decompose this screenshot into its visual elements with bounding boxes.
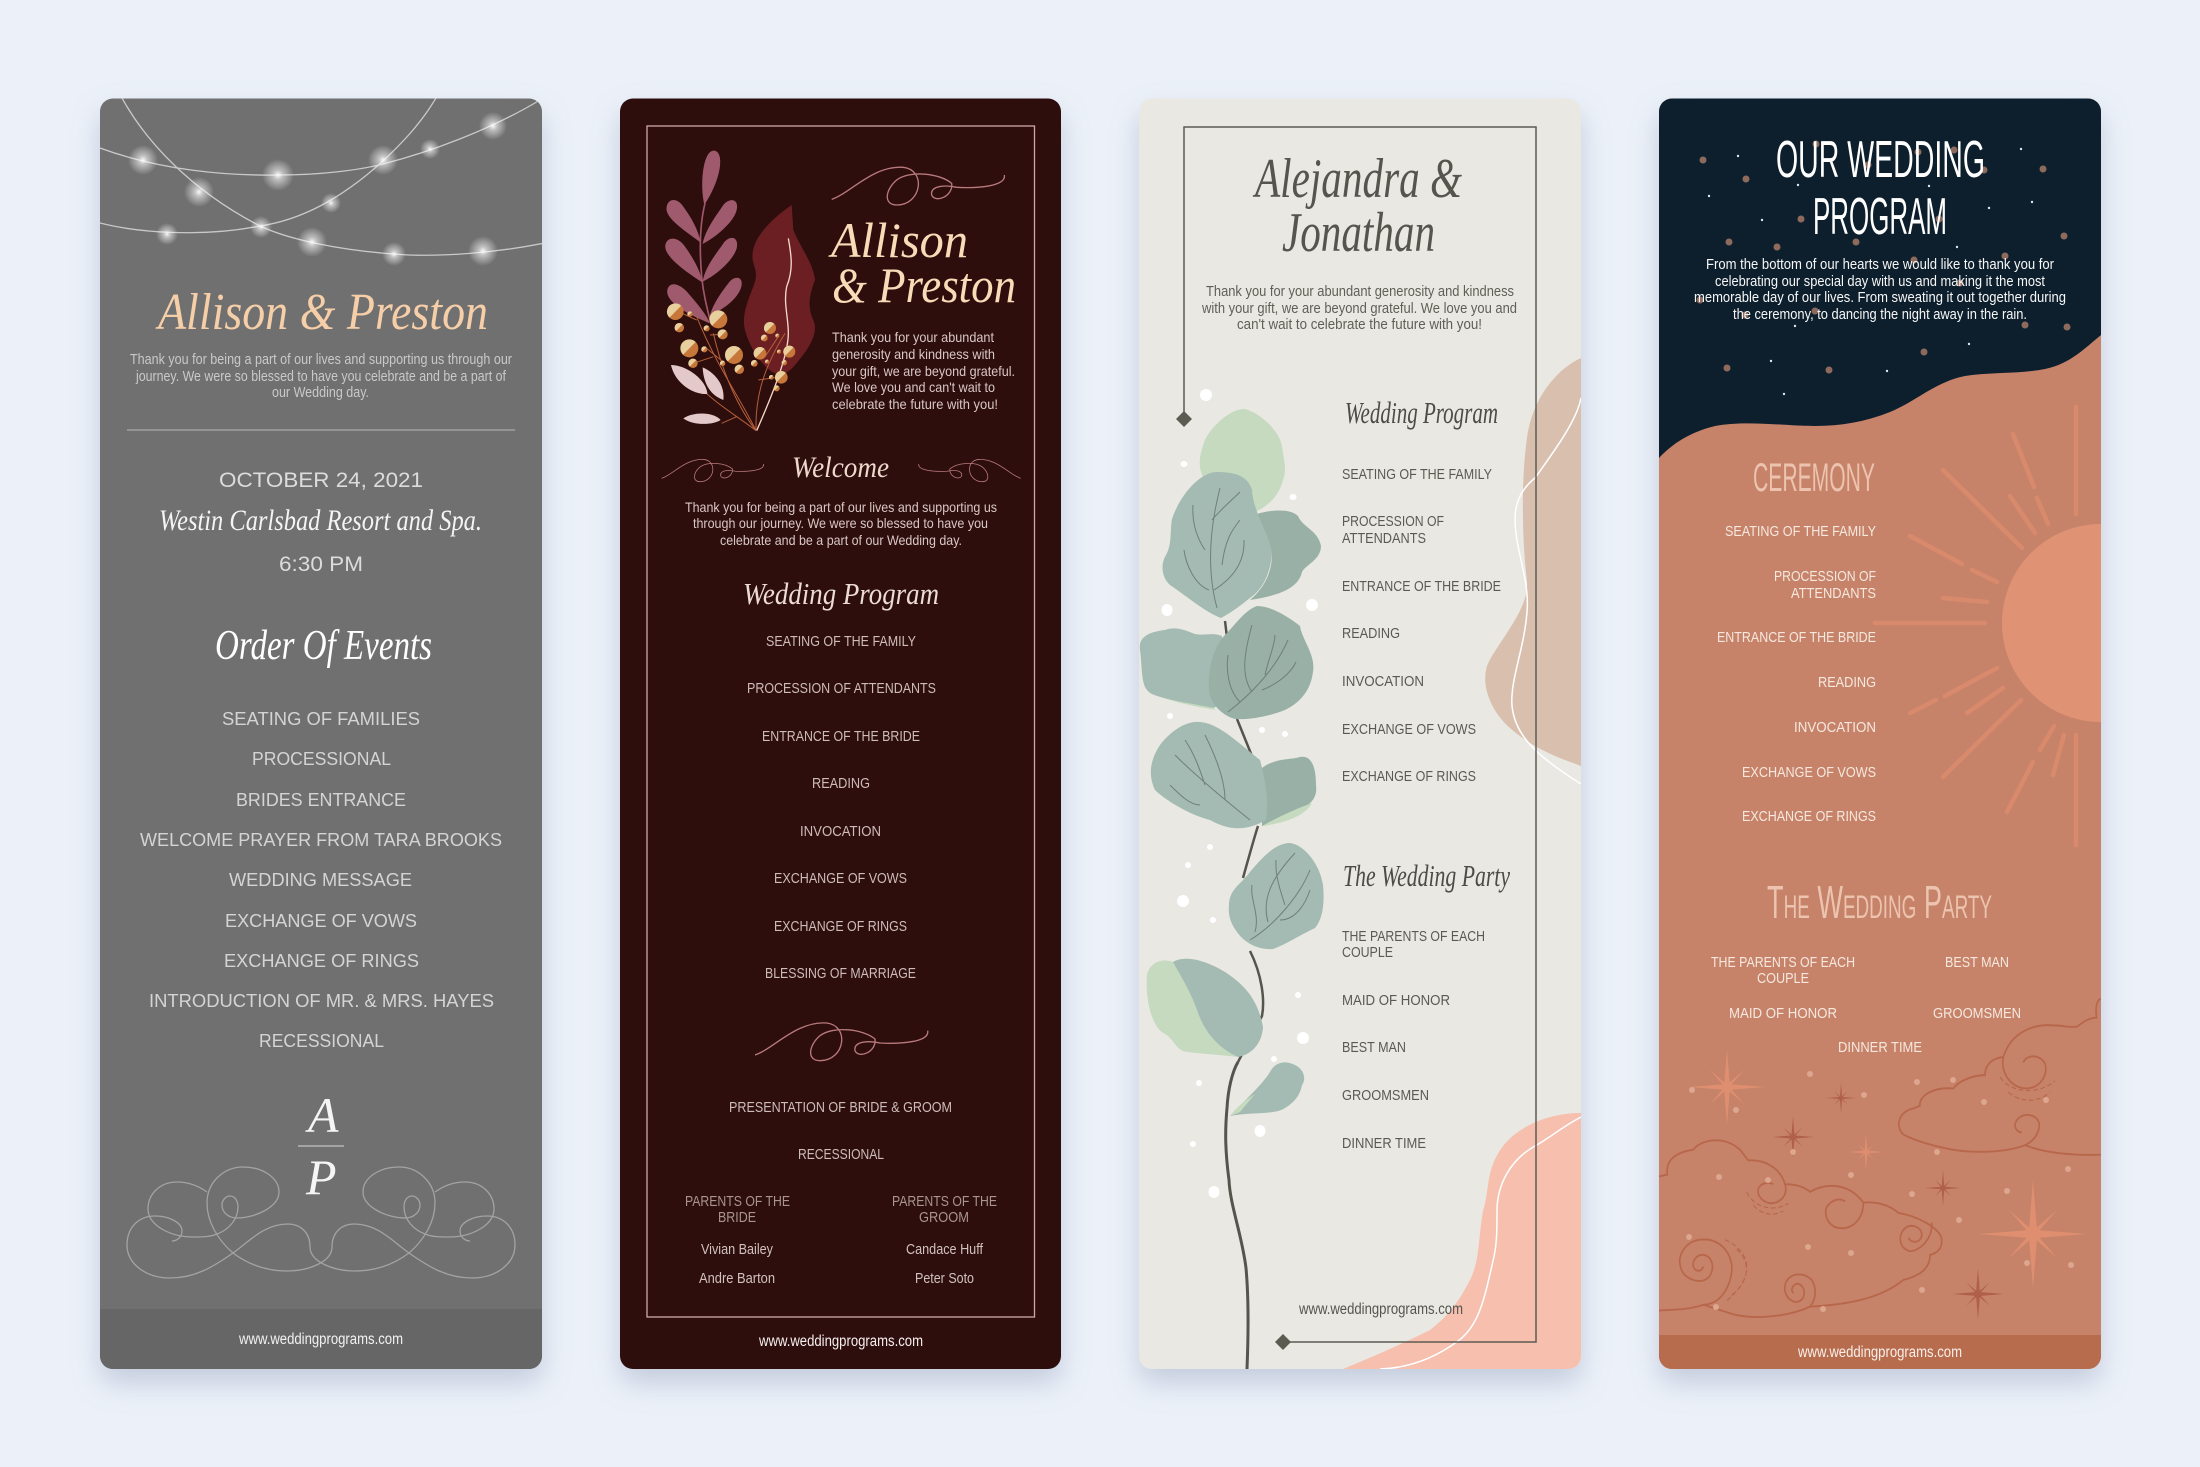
ceremony list: EXCHANGE OF RINGS xyxy=(1742,808,1876,825)
ceremony list: INVOCATION xyxy=(1794,719,1876,736)
wedding party list: DINNER TIME xyxy=(1342,1135,1426,1152)
program list: EXCHANGE OF RINGS xyxy=(774,918,907,935)
wedding party list: MAID OF HONOR xyxy=(1342,992,1450,1009)
program list: EXCHANGE OF VOWS xyxy=(774,870,907,887)
heading: Allison & Preston: Allison xyxy=(828,212,968,268)
ceremony list: SEATING OF THE FAMILY xyxy=(1725,523,1876,540)
heading: Alejandra & Jonathan: Alejandra & xyxy=(1252,148,1462,210)
parents of the groom: PARENTS OF THE xyxy=(892,1194,997,1210)
thank-you paragraph: memorable day of our lives. From sweating it out together during xyxy=(1694,290,2066,306)
order of events list: PROCESSIONAL xyxy=(252,748,391,769)
order of events list: EXCHANGE OF RINGS xyxy=(224,950,419,971)
footer url: www.weddingprograms.com xyxy=(238,1331,403,1348)
wedding party names: THE PARENTS OF EACH xyxy=(1711,954,1855,971)
thank-you paragraph: Thank you for your abundant xyxy=(832,329,994,345)
intro paragraph: journey. We were so blessed to have you celebrate and be a part of xyxy=(135,369,507,385)
intro paragraph xyxy=(130,352,512,401)
program list: ENTRANCE OF THE BRIDE xyxy=(1342,578,1501,595)
welcome paragraph: through our journey. We were so blessed to have you xyxy=(693,515,988,531)
heading: The Wedding Party: The Wedding Party xyxy=(1767,876,1992,928)
order of events list: RECESSIONAL xyxy=(259,1030,384,1051)
monogram A and P xyxy=(298,1087,344,1205)
thank-you paragraph: the ceremony, to dancing the night away in the rain. xyxy=(1733,307,2027,323)
thank-you paragraph: can't wait to celebrate the future with you! xyxy=(1237,317,1482,333)
program list: EXCHANGE OF VOWS xyxy=(1342,721,1476,738)
date and venue: 6:30 PM xyxy=(279,553,363,576)
wedding party names: COUPLE xyxy=(1757,970,1809,987)
closing list xyxy=(729,1099,952,1163)
heading: Order Of Events: Order Of Events xyxy=(215,623,432,669)
heading: Our Wedding Program: OUR WEDDING xyxy=(1776,131,1985,189)
closing list: PRESENTATION OF BRIDE & GROOM xyxy=(729,1099,952,1116)
program list: BLESSING OF MARRIAGE xyxy=(765,965,916,982)
heading: Wedding Program: Wedding Program xyxy=(1345,395,1498,430)
thank-you paragraph: We love you and can't wait to xyxy=(832,379,995,395)
heading: Alejandra & Jonathan xyxy=(1252,148,1462,264)
program list xyxy=(1342,466,1501,785)
thank-you paragraph: Thank you for your abundant generosity and kindness xyxy=(1206,284,1514,300)
parents of the bride: Vivian Bailey xyxy=(701,1242,774,1258)
ceremony list: ENTRANCE OF THE BRIDE xyxy=(1717,629,1876,646)
order of events list: SEATING OF FAMILIES xyxy=(222,708,420,729)
program list: READING xyxy=(812,775,870,792)
heading: Allison & Preston: & Preston xyxy=(832,257,1016,313)
parents of the groom xyxy=(892,1194,997,1287)
divider flourish xyxy=(755,1023,928,1061)
intro paragraph: our Wedding day. xyxy=(272,385,369,401)
ceremony list: EXCHANGE OF VOWS xyxy=(1742,764,1876,781)
clouds, stars and dots illustration xyxy=(1659,999,2101,1320)
welcome paragraph xyxy=(685,499,997,548)
ceremony list: ATTENDANTS xyxy=(1791,585,1876,602)
ceremony list: PROCESSION OF xyxy=(1774,568,1876,585)
footer band grey xyxy=(100,1309,542,1369)
heading: Ceremony: CEREMONY xyxy=(1753,456,1875,500)
ornamental flourish xyxy=(127,1167,515,1278)
heading: Our Wedding Program: PROGRAM xyxy=(1813,188,1947,246)
footer url: www.weddingprograms.com xyxy=(758,1333,923,1350)
parents of the groom: Peter Soto xyxy=(915,1271,974,1287)
wedding party names: GROOMSMEN xyxy=(1933,1005,2021,1022)
program list: PROCESSION OF ATTENDANTS xyxy=(747,680,936,697)
date and venue: Westin Carlsbad Resort and Spa. xyxy=(159,504,482,537)
thin frame with diamond ends xyxy=(1176,127,1536,1350)
heading: Welcome: Welcome xyxy=(792,451,889,484)
program list: INVOCATION xyxy=(800,823,881,840)
program list: SEATING OF THE FAMILY xyxy=(766,633,916,650)
monogram A and P: A xyxy=(305,1087,339,1143)
parents of the bride: Andre Barton xyxy=(699,1271,775,1287)
sun with rays xyxy=(1873,405,2101,847)
program list: ENTRANCE OF THE BRIDE xyxy=(762,728,920,745)
program list xyxy=(747,633,936,982)
parents of the groom: GROOM xyxy=(919,1210,969,1226)
thank-you paragraph: your gift, we are beyond grateful. xyxy=(832,363,1015,379)
order of events list: WELCOME PRAYER FROM TARA BROOKS xyxy=(140,829,502,850)
closing list: RECESSIONAL xyxy=(798,1146,884,1163)
panel: sage eucalyptus program card xyxy=(1139,98,1581,1369)
night sky with stars xyxy=(1659,98,2101,458)
abstract blobs xyxy=(1343,358,1581,1369)
footer band terracotta xyxy=(1659,1335,2101,1369)
parents of the bride xyxy=(685,1194,790,1287)
parents of the groom: Candace Huff xyxy=(906,1242,984,1258)
floral illustration xyxy=(662,151,1021,482)
wedding party names xyxy=(1711,954,2021,1056)
heading: Our Wedding Program xyxy=(1776,131,1985,246)
monogram A and P: P xyxy=(305,1149,337,1205)
panel: burgundy program card xyxy=(620,98,1061,1369)
eucalyptus branch illustration xyxy=(1140,389,1324,1369)
thank-you paragraph xyxy=(1694,257,2066,323)
program list: READING xyxy=(1342,625,1400,642)
parents of the bride: BRIDE xyxy=(718,1210,756,1226)
program list: SEATING OF THE FAMILY xyxy=(1342,466,1492,483)
thank-you paragraph: celebrating our special day with us and making it the most xyxy=(1715,274,2045,290)
ceremony list: READING xyxy=(1818,674,1876,691)
thank-you paragraph: celebrate the future with you! xyxy=(832,396,998,412)
date and venue: OCTOBER 24, 2021 xyxy=(219,469,423,492)
program list: PROCESSION OF xyxy=(1342,513,1444,530)
order of events list: INTRODUCTION OF MR. & MRS. HAYES xyxy=(149,990,494,1011)
heading: The Wedding Party: The Wedding Party xyxy=(1343,858,1510,893)
heading: Allison & Preston: Allison & Preston xyxy=(155,284,488,341)
wedding party list: THE PARENTS OF EACH xyxy=(1342,928,1485,945)
wedding party list: GROOMSMEN xyxy=(1342,1087,1429,1104)
parents of the bride: PARENTS OF THE xyxy=(685,1194,790,1210)
heading: Wedding Program: Wedding Program xyxy=(743,576,939,611)
program list: INVOCATION xyxy=(1342,673,1424,690)
order of events list: BRIDES ENTRANCE xyxy=(236,789,406,810)
order of events list: EXCHANGE OF VOWS xyxy=(225,910,417,931)
date and venue xyxy=(159,469,482,576)
welcome paragraph: Thank you for being a part of our lives and supporting us xyxy=(685,499,997,515)
thank-you paragraph xyxy=(1201,284,1517,333)
thank-you paragraph: From the bottom of our hearts we would like to thank you for xyxy=(1706,257,2054,273)
welcome paragraph: celebrate and be a part of our Wedding day. xyxy=(720,532,962,548)
wedding party names: MAID OF HONOR xyxy=(1729,1005,1837,1022)
heading: Allison & Preston xyxy=(828,212,1016,313)
program list: ATTENDANTS xyxy=(1342,530,1426,547)
wedding party names: DINNER TIME xyxy=(1838,1039,1922,1056)
heading: Alejandra & Jonathan: Jonathan xyxy=(1282,202,1435,264)
thank-you paragraph: with your gift, we are beyond grateful. We love you and xyxy=(1201,301,1517,317)
intro paragraph: Thank you for being a part of our lives and supporting us through our xyxy=(130,352,512,368)
thank-you paragraph: generosity and kindness with xyxy=(832,346,995,362)
program list: EXCHANGE OF RINGS xyxy=(1342,768,1476,785)
thank-you paragraph xyxy=(832,329,1015,412)
wedding party names: BEST MAN xyxy=(1945,954,2009,971)
panel: grey program card xyxy=(100,98,545,1369)
wedding party list: BEST MAN xyxy=(1342,1039,1406,1056)
wedding party list: COUPLE xyxy=(1342,944,1393,961)
order of events list xyxy=(140,708,502,1051)
panel: night and sun program card xyxy=(1648,98,2112,1394)
order of events list: WEDDING MESSAGE xyxy=(229,869,412,890)
footer url: www.weddingprograms.com xyxy=(1797,1344,1962,1361)
wedding party list xyxy=(1342,928,1485,1152)
footer url: www.weddingprograms.com xyxy=(1298,1301,1463,1318)
string lights illustration xyxy=(100,98,545,266)
ceremony list xyxy=(1717,523,1876,825)
